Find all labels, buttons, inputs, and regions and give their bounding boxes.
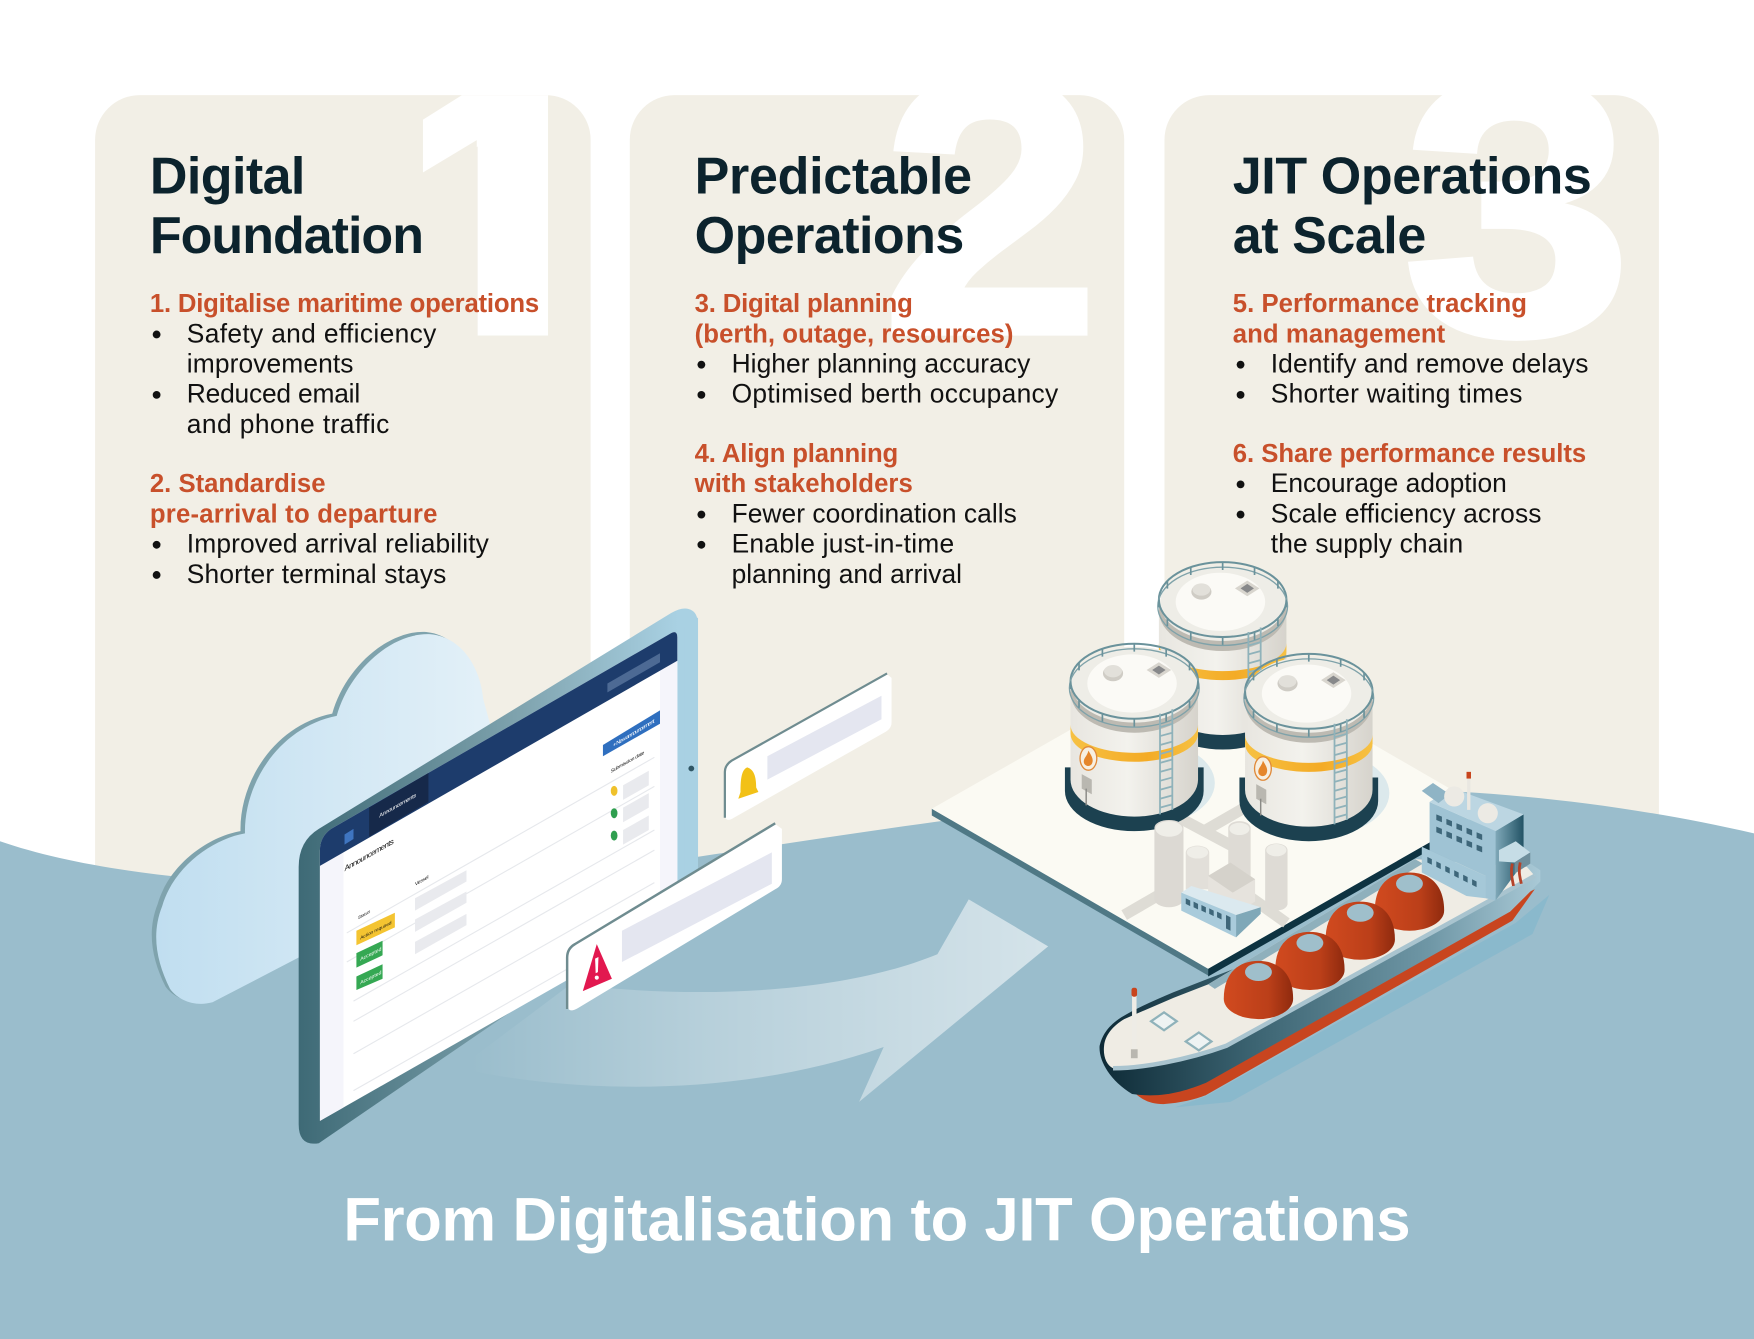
item 3: 3. Digital planning (695, 290, 913, 318)
item 1: and phone traffic (187, 409, 389, 439)
tablet ui labels: Announcements (345, 836, 394, 873)
heading: Digital Foundation: Foundation (150, 207, 424, 265)
title: From Digitalisation to JIT Operations (343, 1186, 1411, 1255)
item 6: Scale efficiency across (1271, 498, 1541, 528)
tablet ui labels: Status (358, 908, 371, 921)
processing units and building (1154, 820, 1288, 937)
heading: Predictable Operations: Predictable (695, 148, 972, 206)
heading: JIT Operations at Scale: JIT Operations (1233, 148, 1592, 206)
heading: JIT Operations at Scale (1233, 148, 1592, 265)
item 3 (695, 290, 1059, 409)
tablet ui labels: Submission date (611, 750, 644, 775)
ship mast and hatches (1131, 988, 1211, 1058)
item 6: the supply chain (1271, 529, 1463, 559)
item 2: 2. Standardise (150, 470, 326, 498)
heading: Digital Foundation (150, 148, 424, 265)
terminal platform (932, 650, 1487, 977)
tablet ui labels (345, 719, 655, 986)
item 1: Safety and efficiency (187, 318, 437, 348)
item 5: 5. Performance tracking (1233, 290, 1527, 318)
item 2: pre-arrival to departure (150, 500, 437, 528)
item 1: 1. Digitalise maritime operations (150, 290, 539, 318)
item 2: Improved arrival reliability (187, 529, 490, 559)
tablet ui labels: Accepted (360, 946, 381, 963)
big number 2: 2 (881, 0, 1100, 410)
item 5: and management (1233, 320, 1446, 348)
LNG carrier ship (1100, 772, 1549, 1107)
item 4 (694, 440, 1017, 589)
panel: Predictable Operations (630, 0, 1124, 945)
tablet ui labels: Accepted (360, 970, 381, 986)
item 5: Identify and remove delays (1271, 349, 1588, 379)
notification: alert (567, 823, 782, 1010)
storage tank: left (1065, 644, 1215, 831)
item 6: 6. Share performance results (1233, 440, 1586, 468)
item 2: Shorter terminal stays (187, 559, 446, 589)
tablet with announcements dashboard (299, 608, 698, 1144)
item 4: 4. Align planning (695, 440, 898, 468)
item 2 (150, 470, 490, 589)
icon: cloud (152, 632, 537, 1004)
item 4: Fewer coordination calls (732, 498, 1017, 528)
heading: JIT Operations at Scale: at Scale (1233, 207, 1426, 265)
item 3: Optimised berth occupancy (732, 379, 1059, 409)
item 4: with stakeholders (694, 470, 913, 498)
tablet ui labels: + New announcement (613, 719, 655, 749)
item 4: planning and arrival (732, 559, 962, 589)
item 1: improvements (187, 349, 353, 379)
item 4: Enable just-in-time (732, 529, 954, 559)
item 1: Reduced email (187, 379, 360, 409)
panel: JIT Operations at Scale (1164, 1, 1659, 945)
item 5 (1233, 290, 1588, 409)
notification: bell (725, 673, 892, 820)
item 6 (1233, 440, 1586, 559)
ship keel (1128, 889, 1535, 1104)
item 5: Shorter waiting times (1271, 379, 1522, 409)
tablet ui labels: Action required (360, 920, 392, 942)
item 3: (berth, outage, resources) (695, 320, 1013, 348)
item 3: Higher planning accuracy (732, 349, 1031, 379)
item 1 (150, 290, 539, 439)
ship hull (1100, 859, 1540, 1095)
storage tank: back (1153, 562, 1303, 749)
heading: Digital Foundation: Digital (150, 148, 305, 206)
ship deck (1104, 859, 1535, 1068)
storage tank: right (1239, 654, 1389, 841)
water wave background (0, 788, 1754, 1339)
ship tank domes (1224, 873, 1444, 1019)
heading: Predictable Operations (695, 148, 972, 265)
tablet ui labels: Announcements (379, 793, 416, 820)
icon: bell (738, 767, 758, 799)
tablet ui labels: Vessel (415, 875, 428, 888)
panel: Digital Foundation (95, 95, 590, 876)
icon: warning triangle (583, 944, 612, 991)
big number 3: 3 (1403, 1, 1632, 411)
arrow: curved progress arrow (459, 899, 1048, 1102)
ship superstructure (1422, 772, 1530, 900)
item 6: Encourage adoption (1271, 468, 1507, 498)
heading: Predictable Operations: Operations (695, 207, 964, 265)
